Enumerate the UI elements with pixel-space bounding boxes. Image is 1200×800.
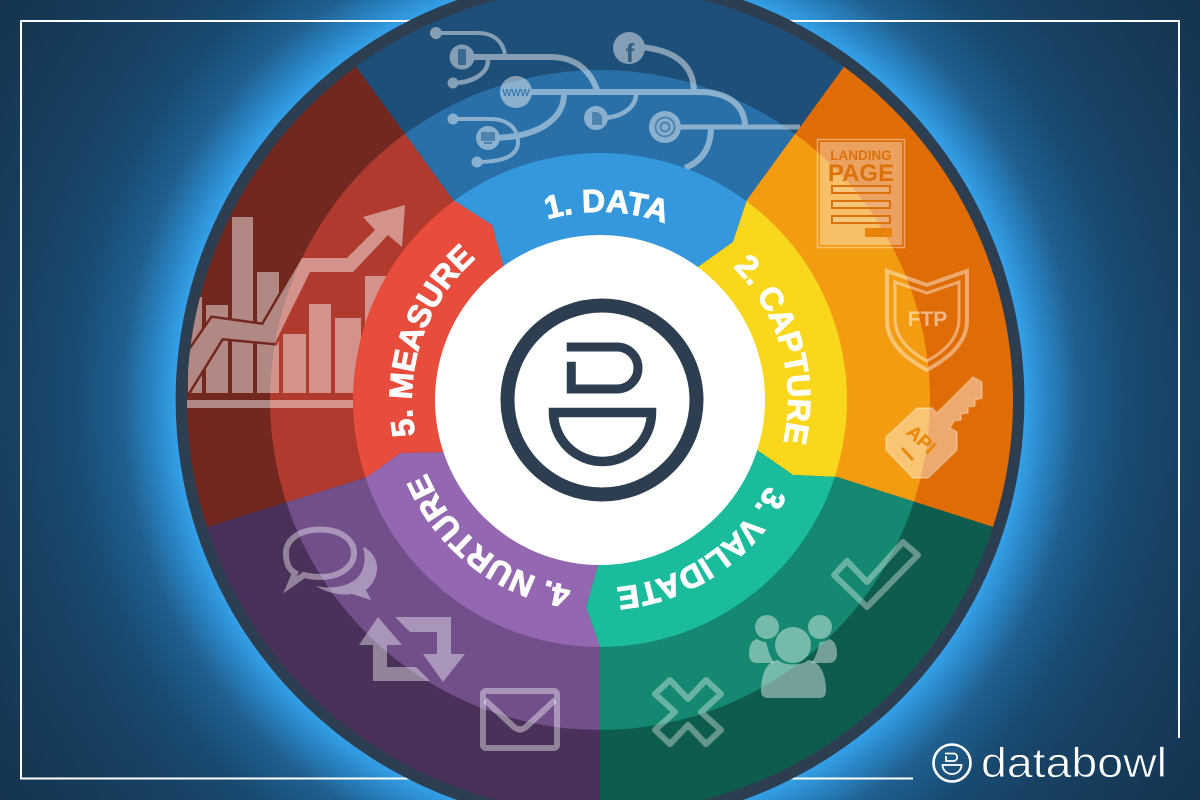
icon: landing page: LANDING <box>830 148 892 163</box>
brand name: databowl <box>981 739 1167 786</box>
icon: data source network <box>430 27 800 168</box>
icon: chat bubbles <box>286 530 377 600</box>
brand logo <box>934 739 1167 786</box>
icon label: www: www <box>501 85 531 99</box>
icon label: facebook f: f <box>626 38 635 68</box>
icon: API key <box>886 377 982 478</box>
label: 4. nurture: 4. NURTURE <box>406 473 570 606</box>
icon: envelope <box>483 691 557 748</box>
segment: 5. measure <box>187 67 504 527</box>
segment: 4. nurture <box>207 452 600 800</box>
icon: FTP shield <box>887 271 967 370</box>
icon: landing page <box>818 140 904 248</box>
icon: repeat arrows <box>359 617 465 682</box>
label: 1. data: 1. DATA <box>544 189 665 224</box>
icon: landing page: PAGE <box>828 160 894 187</box>
center logo <box>508 306 696 494</box>
segment: 1. data <box>356 0 844 267</box>
brand mark <box>934 744 970 782</box>
wheel <box>176 0 1024 800</box>
label: 2. capture: 2. CAPTURE <box>733 255 811 445</box>
icon: cross mark <box>655 680 721 744</box>
icon: API key: API <box>902 421 939 458</box>
icon: growth chart <box>187 205 405 408</box>
segment: 3. validate <box>586 450 993 800</box>
label: 3. validate: 3. VALIDATE <box>616 488 785 610</box>
icon: check mark <box>834 542 918 607</box>
segment: 2. capture <box>698 66 1013 527</box>
center white disc <box>435 235 765 565</box>
icon: people group <box>749 615 837 698</box>
outer dark ring <box>176 0 1024 800</box>
icon: FTP shield: FTP <box>908 308 947 331</box>
label: 5. measure: 5. MEASURE <box>389 243 476 436</box>
